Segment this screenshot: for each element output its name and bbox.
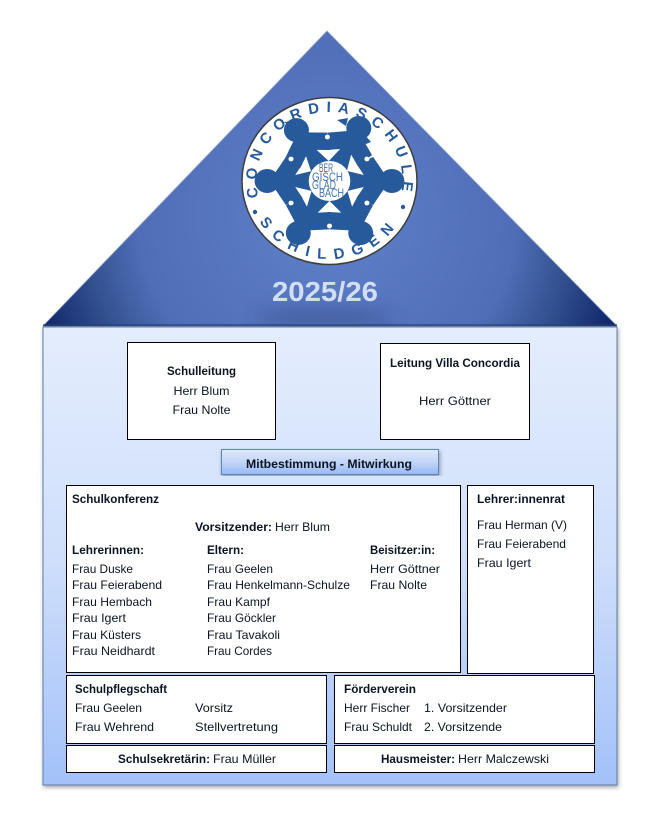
panel: Schulleitung: [128, 342, 276, 440]
panel: Leitung Villa Concordia: Herr Göttner: [419, 394, 491, 408]
list: Lehrerinnen: Frau Neidhardt: [72, 644, 156, 658]
panel: Lehrer:innenrat: [468, 486, 594, 674]
panel: Schulpflegschaft: Vorsitz: [195, 701, 233, 715]
heading: Schulkonferenz: Schulkonferenz: [72, 492, 159, 506]
list: Eltern: Frau Göckler: [207, 611, 276, 625]
panel: Förderverein: 1. Vorsitzender: [424, 701, 507, 715]
panel: Hausmeister: Herr Malczewski: [458, 752, 549, 766]
panel: Lehrer:innenrat: Frau Herman (V): [477, 518, 567, 532]
panel: Schulleitung: Frau Nolte: [172, 403, 231, 417]
Vorsitzender line: Vorsitzender:: [195, 520, 272, 534]
list: Eltern: Frau Kampf: [207, 595, 271, 609]
panel: Lehrer:innenrat: Frau Igert: [477, 556, 532, 570]
panel: Schulsekretärin: Frau Müller: [213, 752, 276, 766]
list: Eltern: Eltern:: [207, 543, 244, 557]
roof: [43, 31, 617, 328]
list: Beisitzer:in: [370, 543, 440, 592]
list: Lehrerinnen: Frau Feierabend: [72, 578, 162, 592]
Vorsitzender line: Herr Blum: [275, 520, 330, 534]
list: Eltern: Frau Tavakoli: [207, 628, 280, 642]
list: Eltern: Frau Henkelmann-Schulze: [207, 578, 350, 592]
logo ring lettering: CONCORDIASCHULE: [246, 102, 414, 198]
list: Lehrerinnen: Lehrerinnen:: [72, 543, 144, 557]
list: Lehrerinnen: Frau Duske: [72, 562, 133, 576]
panel: Leitung Villa Concordia: [380, 344, 530, 440]
panel: Förderverein: Herr Fischer: [344, 701, 410, 715]
banner: Mitbestimmung - Mitwirkung: Mitbestimmung - Mitwirkung: [246, 457, 412, 471]
panel: Schulpflegschaft: Stellvertretung: [195, 720, 278, 734]
panel: Schulleitung: Schulleitung: [167, 364, 236, 378]
panel: Förderverein: [334, 676, 594, 744]
hair details: [284, 118, 371, 236]
panel: Hausmeister: [334, 746, 594, 772]
list: Beisitzer:in: Beisitzer:in:: [370, 543, 435, 557]
panel: Schulpflegschaft: Schulpflegschaft: [75, 682, 167, 696]
list: Lehrerinnen: Frau Igert: [72, 611, 127, 625]
panel: Lehrer:innenrat: Frau Feierabend: [477, 537, 566, 551]
list: Lehrerinnen: [72, 543, 162, 658]
panel: Leitung Villa Concordia: Leitung Villa Concordia: [390, 356, 520, 370]
logo centre lettering: GISCH: [312, 170, 343, 184]
panel: Förderverein: 2. Vorsitzende: [424, 720, 502, 734]
panel: Förderverein: Förderverein: [344, 682, 416, 696]
panel: Förderverein: Frau Schuldt: [344, 720, 413, 734]
panel: Schulpflegschaft: [66, 676, 326, 744]
school logo: [241, 96, 418, 266]
Vorsitzender line: [195, 520, 330, 534]
year label: 2025/26: [272, 276, 378, 307]
panel: Schulsekretärin: [66, 746, 326, 772]
panel: Schulpflegschaft: Frau Geelen: [75, 701, 142, 715]
panel: Lehrer:innenrat: Lehrer:innenrat: [477, 492, 565, 506]
banner: Mitbestimmung - Mitwirkung: [222, 450, 438, 474]
list: Lehrerinnen: Frau Küsters: [72, 628, 141, 642]
panel: Schulsekretärin: Schulsekretärin:: [118, 752, 210, 766]
panel: Hausmeister: Hausmeister:: [381, 752, 455, 766]
logo centre lettering: BACH: [319, 186, 344, 200]
panel: Schulpflegschaft: Frau Wehrend: [75, 720, 154, 734]
logo centre lettering: [312, 161, 344, 200]
logo centre lettering: GLAD: [312, 178, 336, 192]
list: Eltern: [207, 543, 350, 658]
logo ring lettering: [246, 102, 414, 260]
logo centre lettering: BER: [319, 161, 333, 175]
logo ring lettering: SCHILDGEN: [260, 217, 394, 260]
list: Eltern: Frau Geelen: [207, 562, 273, 576]
list: Eltern: Frau Cordes: [207, 644, 272, 658]
panel: Schulkonferenz: [66, 486, 460, 672]
list: Beisitzer:in: Frau Nolte: [370, 578, 427, 592]
panel: Schulleitung: Herr Blum: [174, 384, 230, 398]
list: Beisitzer:in: Herr Göttner: [370, 562, 440, 576]
children circle: [255, 106, 404, 255]
house body: [43, 327, 617, 785]
list: Lehrerinnen: Frau Hembach: [72, 595, 152, 609]
